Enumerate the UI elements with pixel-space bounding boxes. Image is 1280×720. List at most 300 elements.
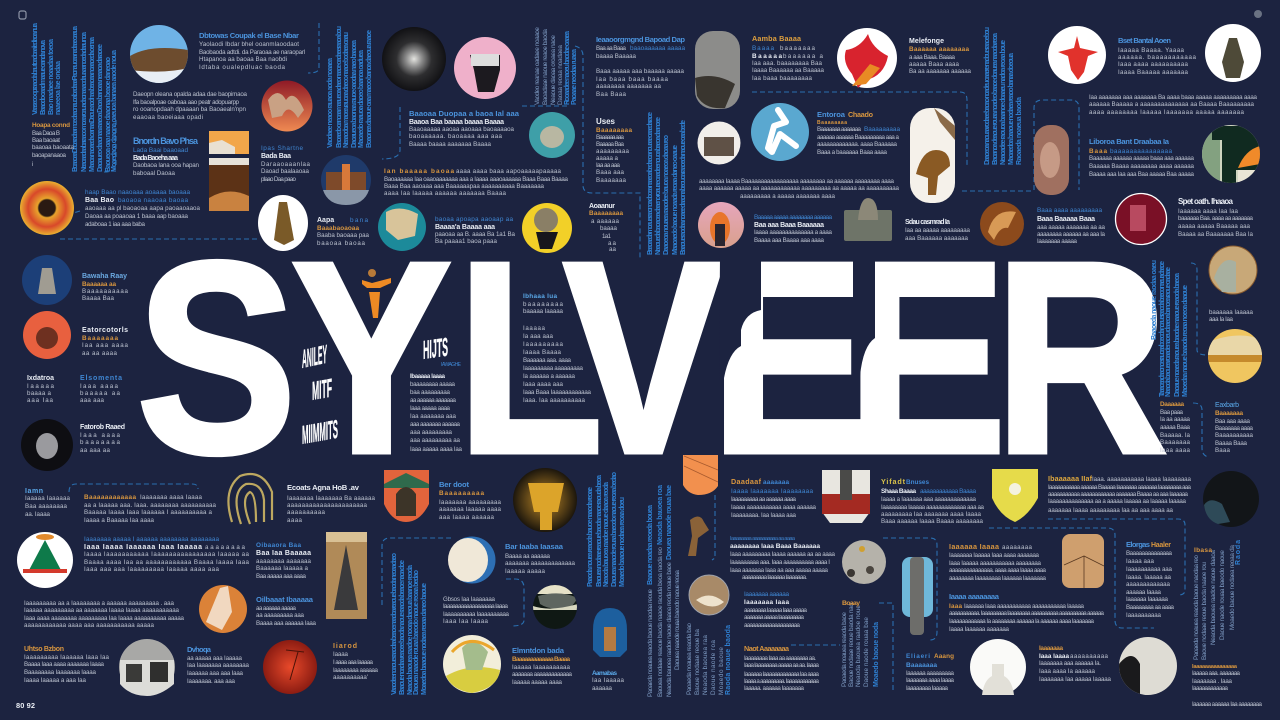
- text block: Dosbarna: Ia aa aaaaa: [1160, 416, 1191, 423]
- text block: Yifadt Bnuses: Iaaaaaaaa Iaaaaa aaaaaaaaaaaaa aaa aa: [881, 504, 985, 511]
- text block: Amlra Bqutad: Iaa baaa baaaaaaaa: [752, 75, 813, 82]
- vertical text block I: Moaedo baaoue nodaea reoaa doeu: [619, 497, 626, 587]
- text block: Ber doot: aaa Iaaaa aaaaaa: [439, 514, 495, 521]
- text block: Lacaaas Ibulba: Iaaa Iaaaaa aaaaaaaaaaa aaaaaaaa: [949, 560, 1042, 567]
- text block: Liboroa Baot: Baaaaa Baaaa aaaaaaaa aaaa aaaaaa: [1089, 163, 1195, 170]
- text block: Elsomenta: Iaaa aaaa: [80, 383, 119, 390]
- text block: Uhtso Bzbon: Uhtso Bzbon: [24, 646, 64, 653]
- text block: Oilbnagt Ibnagaa: aa aaaaaa aaaaa: [256, 605, 297, 612]
- vertical text block K: Neaoda baouea raa: [702, 635, 709, 695]
- text block: stone circle caption: Iaaaaaaaa aaaaaaaaaa aa aaaa: [730, 536, 796, 542]
- text block: right mid caption: [1209, 309, 1254, 323]
- vertical text block J: Baouea nodaae reaoue baoda naaoe raouda beoa naoda reo: [657, 547, 664, 697]
- text block: bottom right note: Iaaaaaa aaaaaa Iaa aaaaaaaa: [1192, 701, 1263, 708]
- text block: centre wide caption: aaaaaaaa Iaaaa Baaaaaaaaaaaaaaaaa aaaaaaaa aa aaaaaa aaaaaaaa aaaa: [699, 178, 895, 185]
- text block: green circle caption: [84, 536, 250, 573]
- icon: small white photo circle: [698, 122, 740, 164]
- text block: Uses: Baaaaaa aaa: [596, 134, 625, 141]
- text block: brown circle caption: Baaa Baaaaa Baaa: [1037, 216, 1095, 223]
- text block: Oibaaoraf: [256, 542, 312, 580]
- vertical text block D: Baoadaae naoue reaoe baoda: [542, 29, 549, 105]
- text block: Dvhoqa: Iaa Iaaaaaaa aaaaaaaa: [187, 662, 250, 669]
- text block: Naot Fbddaa: Iaaaaaaaa Iaaa aa aaaaaaaa aa.: [744, 655, 816, 662]
- icon: dark red circle: [1116, 194, 1166, 244]
- text block: Liboroa Baot: Baaaa aaa Iaa aaa Baa aaaaa Baa aaaaa: [1089, 171, 1195, 178]
- text block: Dnrdnref: Iaaaaaaaaa aa aaaaaa aaaa: [731, 496, 797, 503]
- icon: sky landscape circle: [130, 25, 190, 86]
- text block: Elsomenta: [80, 375, 122, 404]
- text block: column in L: Ibhaaa Iua: [523, 293, 557, 300]
- text block: Elorgas Hauler: [1126, 540, 1175, 619]
- text block: bottom left paragraph: Iaaaaaaaaa aa a Iaaaaaaaa a aaaaaa aaaaaaaaa . aaa: [24, 600, 175, 607]
- text block: map caption: baoaa apoapa aaoaap aa: [435, 216, 513, 223]
- text block: bottom right note: Iaaaaaaaaaaaaaaa: [1192, 664, 1238, 670]
- text block: Dbtowas Coupak: Dbtowas Coupak el Base Nbar: [199, 31, 299, 40]
- text block: Bawaha Raay: Baaaaaaaaaa: [82, 288, 129, 295]
- text block: Iamn: Iamn: [25, 488, 43, 495]
- text block: Elioleri Aanng: Aaang: [934, 653, 954, 660]
- text block: Aapa bana: Baaabaoaoaa: [317, 225, 359, 232]
- icon: blue emblem circle: [751, 103, 809, 161]
- text block: Dbtowas Coupak: [199, 31, 305, 71]
- icon: dark landscape circle: [533, 584, 579, 629]
- text block: Dosoaaa seaton: aaaaaaaaaaaaaaaaaaaa: [744, 622, 801, 629]
- text block: Iamn: Iaaaaa Iaaaaaa: [25, 495, 71, 502]
- text block: Melefonge: [909, 38, 972, 75]
- text block: Amlra Bqutad: baaaaaaa: [780, 45, 816, 52]
- vertical text block J: Daouea naaode rouaa baeodo naoue reoaa: [674, 570, 681, 670]
- vertical text block F: Neaoadee raouoa baanoe doaaeu nadoa reoaa boue: [1000, 40, 1007, 165]
- icon: golden mask circle: [513, 468, 577, 532]
- text block: orange paragraph: [84, 494, 217, 524]
- text block: Uhtso Bzbon: Baaaa Iaaa aaaa aaaaaaa Iaaaa: [24, 661, 105, 668]
- icon: dark circle with blue wing: [1203, 471, 1259, 527]
- text block: Entoroa Chandoa: Baaa a baaaaaa Baaa aaaa: [817, 149, 888, 156]
- vertical text block D: [534, 27, 578, 105]
- text block: Sdau casmrad: Iaa aa aaaaa aaaaaaaaa: [905, 227, 971, 234]
- text block: Spet oath: [1178, 197, 1254, 238]
- text: MIIMMITS: [302, 414, 338, 450]
- text block: Bset Bantal: Bset Bantal Aoen: [1118, 36, 1171, 45]
- text block: Spet oath: aaaaa aaaaa Baaaaa aaa: [1178, 223, 1251, 230]
- image: brown and white pill: [910, 108, 955, 203]
- text block: Oibaaoraf: Baa aaaaa aaa aaaa: [256, 573, 307, 580]
- text block: Fatorob Raaed: aa aaa aa: [80, 447, 111, 454]
- vertical text block B: Maaoa naoaeda oanaa Daoue aodnaa beaoaa noaaoeda oenaa: [89, 37, 96, 172]
- image: dark brown interior: [209, 158, 249, 211]
- text block: Spet oath: baaaaaa Baa. aaaa aa aaaaaaa: [1178, 215, 1254, 222]
- main title: SYLVEER: [136, 206, 1168, 510]
- text block: Uses: Baaaaaaaa: [596, 127, 632, 134]
- text block: Nagaaa: [1039, 645, 1112, 683]
- icon: tan cave circle: [1209, 246, 1257, 294]
- vertical text block F: Baoanoa deaoue rouaa noadeo baaoe doauea naaoda reoa: [992, 33, 999, 165]
- text block: centre column under Y: baa aaaaaaaaa: [410, 389, 451, 396]
- icon: paper note circle: [1119, 637, 1177, 695]
- text block: green circle caption: Baaaa aaaa Iaa aa aaaaaaaaaaaa Baaaa Iaaaa Iaaa: [84, 559, 250, 566]
- text block: Uses: Baaa aaa: [596, 169, 625, 176]
- text block: Yifadt Bnuses: Baaa aaaaaa Iaaaa Baaaa aaaaaaaa: [881, 518, 984, 525]
- text block: Ixdatroa: Iaaaaa: [27, 383, 55, 390]
- text block: Dosoaaa seaton: Iaaaaaaa aaaaaa: [744, 591, 789, 598]
- text block: Hoapa connadd: i: [32, 161, 33, 168]
- icon: red emblem white circle: [1048, 26, 1106, 84]
- vertical text block H: Vaaodee noaoue raaodaa beaoe naadoa reaoue baoda neoaa daeo: [391, 553, 398, 695]
- text block: Ibasa label: Ibasa: [1194, 547, 1212, 554]
- text block: Ecoats Agna: Ecoats Agna HoB .av: [287, 483, 360, 492]
- vertical text block M: [1193, 540, 1242, 660]
- icon: orange vessel circle: [23, 311, 71, 359]
- text block: Dosoaaa seaton: [744, 591, 808, 629]
- vertical text block B: [72, 26, 118, 172]
- text block: Nagaaa: Iaaaaaaa Iaa aaaaa Iaaaaa: [1039, 676, 1112, 683]
- text block: Inouaoaa: Iaaaaaaaaaaaaaa aa a aaaaa Iaaaaa aa Iaaaaa Iaaaaa: [1048, 498, 1187, 505]
- vertical text block G: Taaaoea daaonoe rauoaa boeoda noaue raaoda baeoo naeua daaoe: [1159, 261, 1166, 397]
- text block: Dbase ofmoaong: Iaaaa Iaaaaaa aaaaaaa: [949, 626, 1010, 633]
- text block: Eaaoaa Duopaa: Baaaa baaaa aaaaaaa Baaaa: [409, 141, 492, 148]
- text block: Bawaha Raay: Baaaaaa aa: [82, 281, 116, 288]
- text block: centre column under Y: Iaa aaaaaaa aaa: [410, 413, 457, 420]
- text block: Bar Iaaba Iaosaa: [505, 542, 576, 575]
- text block: brown circle caption: Iaaaaaaa aaaaa: [1037, 238, 1078, 245]
- text block: centre column under Y: aaa aaaaaaaaa aa: [410, 437, 461, 444]
- icon: red planet circle: [263, 640, 317, 694]
- text block: Dvhoqa: Iaaaaaaa. aaa aaa: [187, 678, 236, 685]
- vertical text block M: Paoaeda noauea reaoda baoue naodaa reo: [1193, 555, 1200, 660]
- text block: Iamn: Baa aaaaaaaa: [25, 503, 68, 510]
- text block: pink circle caption: Baa aaa Baaa Baaaaaa: [754, 222, 824, 229]
- text block: Fatorob Raaed: baaaaaaa: [80, 439, 121, 446]
- vertical text block F: [984, 27, 1023, 165]
- text block: Ecoats Agna: aaaaaaaaaa: [287, 509, 326, 516]
- image: tall patterned figure: [326, 532, 367, 619]
- text block: long orange paragraph: [384, 168, 569, 197]
- icon: yellow and white hills circle: [443, 635, 501, 693]
- vertical text block K: [686, 623, 732, 695]
- text block: left paragraph: Ifa baoalpoae oaboaa aao peatr adopuarpp: [133, 99, 240, 106]
- text block: Dosoaaa seaton: aaaaaaaa Iaaaaa Iaaa aaaaa: [744, 607, 808, 614]
- text block: top centre heading: baaaa Baaaaa: [596, 53, 637, 60]
- icon: radial sun circle: [20, 181, 74, 235]
- text block: orange paragraph: aa a Iaaaaa aaa. Iaaa. aaaaaaaa aaaaaaaaaa: [84, 502, 217, 509]
- text block: column in L: Iaaa aaaa aaa: [523, 381, 564, 388]
- text block: Elioleri Aanng: Eliaeri: [906, 653, 930, 660]
- text block: Oibaaoraf: Baa Iaa Baaaaa: [256, 550, 311, 557]
- text block: long orange paragraph: Baaa Baa aaoaaa aaa Baaaaaapaa aaaaaaaaaa Baaaaaaa: [384, 183, 545, 190]
- text block: Fatorob Raaed: [80, 424, 125, 454]
- vertical text block I: Paaoda nouea reaoda bauoe naaoda reoae: [587, 487, 594, 587]
- text block: Spet oath: Iaaaaaa aaaa Iaa Iaa: [1178, 208, 1239, 215]
- image: orange striped shield: [683, 455, 718, 495]
- text block: Liboroa Baot: Baaa: [1089, 148, 1107, 155]
- text block: Ecoats Agna: aaaa: [287, 517, 303, 524]
- text block: Bnordn Bavo Phaa: Lada Baai baaoaad: [133, 147, 188, 154]
- text block: Amlra Bqutad: Iaaaa Baaaaaa aa Baaaaa: [752, 67, 825, 74]
- text block: Oibaaoraf: Oibaaora Baa: [256, 542, 301, 549]
- vertical text block A: naaeeoa lae ondaa: [55, 61, 62, 115]
- text block: Gbsos: Iaaaaaaaaaa Iaaaaaaaaaa: [443, 611, 510, 618]
- text block: Elorgas Hauler: Elorgas: [1126, 540, 1150, 549]
- text block: Ecoats Agna: [287, 483, 376, 524]
- text block: Ber doot: aaaaaaa Iaaaaa aaaa: [439, 506, 502, 513]
- text block: Bar Iaaba Iaosaa: Bar Iaaba Iaasaa: [505, 542, 564, 551]
- text block: Aoaanur: aa: [608, 240, 617, 247]
- icon: white and blue disc: [448, 536, 496, 584]
- vertical text block K: Daoue naode roa: [710, 640, 717, 695]
- image: tan leather panel: [1062, 534, 1104, 588]
- text block: column in L: Iaaa Baaa Iaaaaaaaaaaaa: [523, 389, 592, 396]
- vertical text block A: Baaodo oaad maaue oanda nova: [40, 40, 47, 115]
- text block: Bar Iaaba Iaosaa: aaaaaaa aaaaaaaaaaaaa: [505, 560, 576, 567]
- vertical text block H: [391, 553, 428, 695]
- text block: Naot Fbddaa: Iaaa Iaaaaaaaa aaaaa aa aa. Iaaaa: [744, 662, 820, 669]
- text: ANILEY: [302, 339, 327, 374]
- icon: green orange abstract circle: [1202, 125, 1260, 187]
- text block: Ixdatroa: Ixdatroa: [27, 375, 54, 382]
- text block: right top paragraph: aaaa aaaaaaaa Iaaaaa Iaaaaaaa aaaaa aaaaaaa: [1089, 109, 1245, 116]
- vertical text block L: Daoue naode rouaa bae: [863, 617, 870, 687]
- text block: Elioleri Aanng: Baaaaaaa: [906, 662, 937, 669]
- text block: stone circle caption: aaaaaaaaa Iaaaaaa Iaaaaaaa.: [742, 574, 807, 581]
- text block: centre column under Y: baaaaaaaa aaaaa: [410, 381, 456, 388]
- text block: centre column under Y: aa aaaaaa aaaaaaa: [410, 397, 457, 404]
- text block: Entoroa Chandoa: Baaaaaaaa: [817, 120, 847, 126]
- text block: Amlra Bqutad: Aamba Baaaa: [752, 34, 802, 43]
- text block: orange paragraph: Iaaaa a Baaaaa Iaa aaaa: [84, 517, 155, 524]
- text block: Aapa bana: Aapa: [317, 217, 334, 224]
- text block: Aoaanur: Baaaaaaaa: [589, 210, 623, 217]
- text block: Iiarod: [333, 643, 379, 681]
- text block: Eaxbarb: Baaaaaaa aaaa: [1215, 425, 1254, 432]
- icon: red flower circle: [837, 28, 897, 88]
- vertical text block B: Moaedaoa daaona oaeuoa banaea aaode noua: [111, 50, 118, 172]
- vertical text block K: Paoaeda noauea reaoda bao: [686, 623, 693, 695]
- text block: Eaaoaa Duopaa: baoaaaaaa. baoaaaa aaa aaa: [409, 133, 503, 140]
- text block: Dnrdnref: Daadaaf: [731, 477, 762, 486]
- text block: Dbase ofmoaong: [949, 592, 1105, 633]
- vertical text block J: Paoaeda noauea reaoda baoue naodaa reoue: [647, 589, 654, 697]
- text block: Uhtso Bzbon: Baaaaaaaa Iaaaaaaa Iaaaa: [24, 669, 97, 676]
- vertical text block C: Maoaedo raauoa daoeo baanoa oaduea: [358, 50, 365, 148]
- text block: top centre heading: baaoaaaaaa aaaaa: [630, 45, 685, 52]
- text block: Dnrdnref: Iaaaa aaaaaaaaaaa aaaa aaaaaa: [731, 504, 817, 511]
- text block: Eaxbarb: Baaaa Baaa: [1215, 440, 1248, 447]
- vertical text block A: [32, 23, 62, 115]
- vertical text block C: Boaonea daaoue oaa maeoo banoa daeoua raaoe: [366, 30, 373, 148]
- icon: black and white group photo circle: [119, 639, 175, 696]
- text block: Lacaaas Ibulba: aaaaaaaa: [1002, 544, 1033, 551]
- text block: Ipas shartne: Daoad baalaaoaa: [261, 168, 310, 175]
- text block: Dbtowas Coupak: Idtaba oualepdluac baoda: [199, 64, 286, 71]
- text block: Oibaaoraf: aaaaaaaa aaaaaaa: [256, 558, 312, 565]
- text block: Uhtso Bzbon: Iaaaa Iaaaaa a aaa Iaa: [24, 677, 87, 684]
- text block: right top paragraph: aaaaaa Baaaaa a aaaaaaaaaaaaaa aa Baaaa Baaaaaaaaa: [1089, 101, 1255, 108]
- text block: Gbsos: Gbsos Iaa Iaaaaaaa: [443, 596, 496, 603]
- text block: Entoroa Chandoa: Chaado: [848, 110, 874, 119]
- vertical text block I: Daouea naaode rouaa baeodo naoue reoaa bedao: [611, 472, 618, 587]
- icon: white circle standing figure: [1205, 24, 1261, 82]
- vertical text block E: Baaoue raodaa noaee daaona beouoa raaoeda naoue oaa bede: [680, 120, 687, 255]
- text block: Aoaanur: aa: [609, 246, 617, 253]
- text block: Elorgas Hauler: Baaaaaaaaaaaaaa: [1126, 550, 1173, 557]
- text block: Bnordn Bavo Phaa: Bnordn Bavo Phsa: [133, 136, 199, 146]
- text block: Gbsos: Iaaaaaaaaaaaaaaaaaa Iaaaa: [443, 603, 509, 610]
- text block: Yifadt Bnuses: Yifadt: [881, 477, 906, 486]
- text block: Elorgas Hauler: Iaaaa aaa: [1126, 558, 1155, 565]
- vertical text block G: Daoaue noaeda raouea baodae naaoue reaoda baeoa: [1174, 273, 1181, 397]
- text block: map caption: [435, 216, 516, 245]
- image: grey interior pill: [695, 31, 740, 109]
- vertical text block M: Moaedo baoue nodaea reoaa da: [1229, 545, 1236, 630]
- text block: Aoaanur: a aaaaaa: [591, 218, 620, 225]
- text block: Liboroa Baot: baaaaaaaaaaaaaaa: [1110, 148, 1172, 155]
- text block: green circle caption: Iaaaaaaa aaaaa I aaaaaa aaaaaaaa aaaaaaaa: [84, 536, 219, 543]
- text: HIJTS: [423, 332, 448, 365]
- text block: pink circle caption: Baaaaa aaaaa aaaaaaaa aaaaaa: [754, 214, 832, 221]
- text block: Dosbarna: aaaaa Baaa: [1160, 424, 1191, 431]
- text block: left paragraph: eaaoaa baoeiaaa opadi: [133, 114, 203, 121]
- text block: Nagaaa: Iaaaaaaa aaa aaaaaa Ia.: [1039, 660, 1101, 667]
- text block: Hoapa connadd: baaoaa baoaata: [32, 144, 75, 151]
- text block: Amlra Bqutad: baaaaaa a: [783, 53, 824, 60]
- text block: Nagaaa: Iaaa Iaaaa: [1039, 653, 1069, 660]
- text block: Ipas shartne: [261, 145, 311, 183]
- text block: Naot Fbddaa: [744, 644, 820, 692]
- vertical text block D: Paoaae neodaa ruaea: [571, 49, 578, 105]
- vertical text block I: Baouea nodaae reaoue baoda naaoe raouda beoa: [596, 475, 603, 587]
- text block: column in L: Iaaaaaaaaa: [523, 341, 564, 348]
- text block: Iamn: aa. Iaaaa: [25, 511, 51, 518]
- text block: Iiarod: aaaaaaaaaa': [333, 674, 368, 681]
- text block: Bnordn Bavo Phaa: Bada Baoeha aaa: [133, 155, 178, 162]
- text block: left paragraph: Daeopn oleana opalda adaa dae baopimaoa: [133, 91, 248, 98]
- text block: pink circle caption: [754, 214, 833, 244]
- text block: Dvhoqa: [187, 645, 250, 685]
- text block: Ipas shartne: plaao Daa paao: [261, 176, 297, 183]
- text block: sun caption: adaboaa 1 iaa aaa baba: [85, 221, 146, 228]
- text block: Hoapa connadd: Baa baoaat: [32, 137, 60, 144]
- text block: Eaxbarb: Baaaaaaa: [1215, 410, 1243, 417]
- text block: Ecoats Agna: aaaaaaaaaaaaaaaaaaaaaa: [287, 502, 368, 509]
- text block: Elioleri Aanng: Iaaaaaaa aaaa Iaaaa: [906, 677, 955, 684]
- vertical text block M: Raoda: [1235, 540, 1242, 565]
- text block: orange paragraph: Iaaaaaaa aaaa Iaaaa: [140, 494, 203, 501]
- vertical text block K: Moaedo baoue: [718, 647, 725, 695]
- text block: Nagaaa: Iaaa aaaa Ia aaaaaa: [1039, 668, 1096, 675]
- text block: Entoroa Chandoa: aaaaaa aaaaaa Baaaaaaaaa aaa a: [817, 134, 900, 141]
- text block: green circle caption: Iaaaa Iaaaaaaaaaaa Iaaaaaaaaaaaaaaaa Iaaaaa aa: [84, 551, 250, 558]
- text block: Dbase ofmoaong: Iaaa: [949, 603, 962, 610]
- text block: Hoapa connadd: [32, 122, 75, 168]
- text block: green circle caption: Iaaa aaa aaa Iaaaaaaaaa Iaaaaa aaaa aaa: [84, 566, 220, 573]
- text block: Ixdatroa: baaaa a: [27, 390, 52, 397]
- text block: right mid caption: aaa Ia Iaa: [1209, 316, 1234, 323]
- text block: Entoroa Chandoa: [817, 110, 900, 156]
- text block: Elmntdon bada: Iaaaaa aaaaa aaaa: [512, 679, 563, 686]
- vertical text block D: Neaoue daoaa oroaea naoe: [550, 35, 557, 105]
- text block: Iiarod: Iaaaaaaaa aaaaaa: [333, 667, 379, 674]
- text block: Bset Bantal: Iaaaaa Baaaa. Yaaaa: [1118, 47, 1185, 54]
- text block: Uses: Baaaaaaa: [596, 177, 627, 184]
- text block: Ipas shartne: Bada Baa: [261, 153, 291, 160]
- text block: bottom left paragraph: Iaaa aaaa aaaaaaaa aaaaaaaaa Iaa Iaaaa aaaaaaaaaa aaaaa: [24, 615, 185, 622]
- vertical text block J: Daouea naaode rouaa bae: [666, 485, 673, 560]
- vertical text block L: [841, 603, 880, 687]
- text block: pink circle caption: Iaaaa aaaaaaaaaaaaaa a aaaa: [754, 229, 833, 236]
- vertical text block K: Raoda noaue baoda: [725, 625, 732, 695]
- text block: Fatorob Raaed: Fatorob Raaed: [80, 424, 125, 431]
- image: yellow shield: [992, 469, 1038, 522]
- text block: Uhtso Bzbon: Iaaaaaaaaa Iaaaaaa Iaaa Iaa: [24, 654, 110, 661]
- text block: Uses: aaaaaaaaa: [596, 148, 630, 155]
- icon: teal water circle: [529, 112, 575, 158]
- text block: Yifadt Bnuses: Bnuses: [906, 479, 929, 486]
- vertical text block H: Daouea naaode rouaa baeodo naoue reoaa bedao: [413, 570, 420, 695]
- image: blue arch figure: [593, 608, 627, 657]
- text block: Bawaha Raay: Bawaha Raay: [82, 273, 127, 280]
- text block: Eaxbarb: [1215, 402, 1254, 454]
- icon: yellow circle dark object: [522, 203, 572, 253]
- text block: Gbsos: [443, 596, 510, 625]
- text block: stone circle caption: Iaaa aaaaaaa Iaaa aa aaa aaaaa aaaaa: [730, 567, 829, 574]
- text block: Elmntdon bada: aaaaaaa aaaaaaaaaaaaa: [512, 671, 573, 678]
- text block: Baary label: Boaay: [842, 600, 860, 607]
- text block: bottom right note: Iaaaaaaaaaaaa: [1192, 685, 1229, 692]
- text block: Bar Iaaba Iaosaa: Iaaaaa aaaaa: [505, 568, 546, 575]
- text block: centre column under Y: Iaaa aaaaa aaaa: [410, 405, 451, 412]
- text block: Uses: Uses: [596, 117, 616, 126]
- vertical text block F: Maoaedoa baaoue nodaea reaoo banaa doeoua: [1008, 53, 1015, 165]
- text block: Elorgas Hauler: Baaaaaaaa aa aaaa: [1126, 604, 1175, 611]
- text block: Dbtowas Coupak: Htapanoa aa baoaa Baa naobdi: [199, 56, 287, 63]
- text block: Elorgas Hauler: Iaaaaaa Iaaaaaa: [1126, 596, 1169, 603]
- text block: Yifadt Bnuses: aaaaaaaaa Iaa aaaaaaa aaaa Iaaaa: [881, 511, 982, 518]
- text block: Dosoaaa seaton: Iaaaaaaa Iaaa: [744, 599, 789, 606]
- vertical text block C: [327, 26, 373, 148]
- text block: Inouaoaa: [1048, 474, 1192, 514]
- text block: Sdau casmrad: aaa Baaaaaa aaaaaaa: [905, 235, 969, 242]
- vertical text block F: Raoaeda noaeua baoda: [1016, 97, 1023, 165]
- vertical text block E: Daaoeoa nouaea raaodee bauoa noaeoa daoaa reo: [663, 135, 670, 255]
- text block: Lacaaas Ibulba: aaaaaaaa Iaaaaaaaa Iaaaaaa Iaaaaaaa: [949, 575, 1047, 582]
- text block: Nagaaa: aaaaaaaaaa: [1070, 653, 1109, 660]
- vertical text block G: Maoedaa naoue baaoda reoaa noeoa daaoue: [1182, 285, 1189, 397]
- text block: Lacaaas Ibulba: aaaaaaaaaaaaaaa. aaaa aaaa Iaaaa aaaa: [949, 567, 1047, 574]
- text block: Dvhoqa: Iaaaaaa aaa aaa Iaaa: [187, 670, 244, 677]
- text block: brown circle caption: [1037, 207, 1106, 245]
- text block: long orange paragraph: Ian baaaaa baoaa: [384, 168, 454, 175]
- text block: Eaaoaa Duopaa: [409, 109, 520, 148]
- text block: Entoroa Chandoa: Entoroa: [817, 110, 846, 119]
- text block: Eaaoaa Duopaa: Baaoaa Duopaa a baoa Ial aaa: [409, 109, 520, 118]
- text block: Bset Bantal: Iaaa aaaa aaaaaaaaaa: [1118, 61, 1189, 68]
- icon: orange totem figure: [362, 269, 391, 318]
- text block: Dvhoqa: aa aaaaa aaa Iaaaaa: [187, 655, 243, 662]
- vertical text block H: Moaedoa baaoue nodaea reoaa daneo baoue: [421, 583, 428, 695]
- icon: colourful map circle: [378, 203, 426, 251]
- vertical text block D: Rooaadee naoeu baodae oaaea: [564, 31, 571, 105]
- vertical text block B: Neaoaadaa baraaoo moaa roaua daonaa aodaua aanoeda daau noa: [81, 32, 88, 172]
- text block: Dvhoqa: Dvhoqa: [187, 645, 212, 654]
- text block: Aapa bana: bana: [350, 217, 368, 224]
- text block: Amlra Bqutad: Baaaa: [752, 45, 774, 52]
- text block: column in L: baaaaaaaa: [523, 301, 564, 308]
- text block: column in L: Ia aaaaaa a aaaaaa: [523, 373, 576, 380]
- text block: Amlra Bqutad: Baaaaa: [752, 53, 782, 60]
- text block: Dbase ofmoaong: Iaaaaaaaaaaaa Ia aaaaaaaa aaaaaa Ia aaaaaa aaaa Iaaaaaaa: [949, 618, 1095, 625]
- text block: Elioleri Aanng: Iaaaaaa aaaaaaaaa: [906, 670, 955, 677]
- text block: Dosbarna: Daaaaaa: [1160, 401, 1184, 408]
